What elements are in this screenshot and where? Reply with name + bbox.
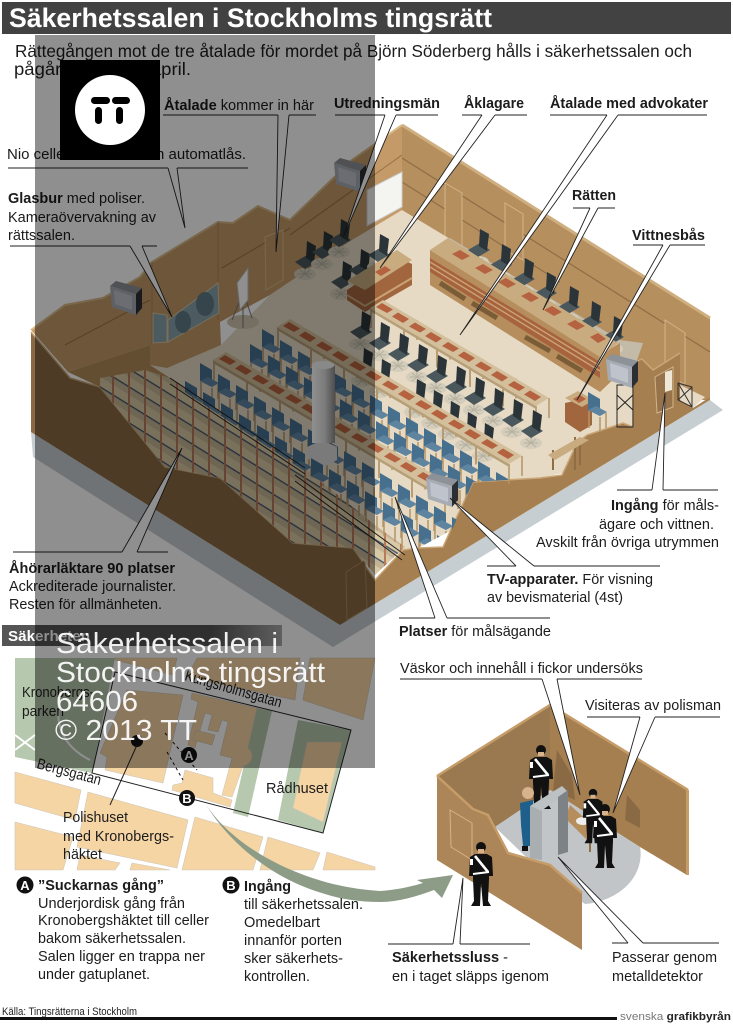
court quarter outline (92, 672, 351, 833)
note B: Ingång: till säkerhetssalen. (244, 896, 363, 913)
tunnel dashed line (165, 733, 197, 780)
chairs: utredningsmän (294, 219, 390, 300)
map labels: parken (22, 703, 64, 720)
callout: TV-apparater: av bevismaterial (4st) (487, 589, 623, 606)
callout: Utredningsmän (334, 95, 440, 238)
map labels: Polishuset (63, 809, 129, 826)
callout: Rätten (543, 187, 616, 310)
note A: Suckarnas gång: bakom säkerhetssalen. (38, 930, 186, 947)
watermark text: © 2013 TT (55, 715, 197, 747)
marker B: B (182, 791, 192, 806)
callout: Ingång för målsägare: Ingång för måls- (611, 497, 719, 514)
note A: Suckarnas gång: Salen ligger en trappa ner (38, 948, 205, 965)
note B: Ingång: sker säkerhets- (244, 950, 343, 967)
note B: Ingång: innanför porten (244, 932, 342, 949)
callout: Väskor (400, 660, 643, 795)
note A: Suckarnas gång (16, 876, 209, 983)
judges platform (435, 238, 643, 375)
callout: Åtalade med advokater: Åtalade med advokater (550, 95, 708, 112)
note A: Suckarnas gång: Kronobergshäktet till celler (38, 912, 209, 929)
TV: left wall (110, 281, 142, 315)
callout: Glasbur (8, 190, 172, 317)
pillar (307, 361, 337, 468)
TV: front (426, 473, 458, 507)
map labels (22, 668, 329, 863)
black chairs: row 2 (351, 348, 495, 462)
front wall door (346, 560, 367, 620)
note B: Ingång: B (226, 878, 236, 893)
railing (170, 378, 405, 560)
intro text (14, 41, 692, 79)
intro text: pågår till den 17 april. (14, 59, 191, 79)
back left wall (437, 705, 550, 827)
intro text: Rättegången mot de tre åtalade för mordet på Björn Söderberg hålls i säkerhetssalen och (15, 41, 692, 61)
source and footer: Källa: Tingsrätterna i Stockholm (2, 1006, 137, 1018)
gallery seating 90 seats (100, 370, 405, 575)
callout: Ingång för målsägare (536, 393, 719, 551)
map labels: Kungsholmsgatan (183, 668, 284, 711)
floor (150, 210, 633, 560)
ground shadow (31, 400, 723, 647)
callout: Utredningsmän: Utredningsmän (334, 95, 440, 112)
title: Säkerhetssalen i Stockholms tingsrätt (9, 3, 492, 33)
front wall (437, 776, 582, 950)
callout: Vittnesbås: Vittnesbås (632, 227, 705, 244)
callout: Åhörarläktare (9, 448, 182, 613)
note A: Suckarnas gång: under gatuplanet. (38, 966, 150, 983)
marker A (181, 747, 197, 763)
side entrance: Ingång (655, 367, 705, 413)
callout: Visiteras (585, 697, 721, 813)
section heading bar (2, 625, 282, 646)
guard behind detector (529, 745, 553, 809)
title bar (2, 2, 731, 34)
guard at door (469, 842, 493, 906)
note A: Suckarnas gång: A (20, 878, 30, 893)
door: Åtalade (265, 230, 283, 290)
judges' bench (430, 238, 620, 392)
TV: back corner (334, 158, 366, 192)
security lock illustration (437, 705, 689, 950)
callout: Åhörarläktare: Resten för allmänheten. (9, 596, 162, 613)
callout: Åtalade med advokater (460, 95, 708, 335)
callout: Åhörarläktare: Ackrediterade journalister. (9, 578, 176, 595)
callout: Säkerhetssluss (388, 878, 549, 985)
witness box (565, 391, 607, 432)
whiteboard on easel (227, 268, 259, 329)
guard at table (583, 789, 603, 843)
callout: Åklagare: Åklagare (464, 95, 524, 112)
map labels: Rådhuset (266, 780, 329, 797)
delegate row 2 (213, 352, 458, 517)
source and footer (0, 1006, 731, 1023)
doors on back wall (445, 183, 685, 385)
note B: Ingång (222, 876, 363, 985)
callout: Ingång för målsägare: ägare och vittnen. (599, 516, 714, 533)
court building (188, 693, 257, 797)
note A: Suckarnas gång: ”Suckarnas gång” (38, 877, 164, 894)
callout: Åhörarläktare: Åhörarläktare 90 platser (9, 560, 175, 577)
note B: Ingång: Ingång (244, 878, 291, 895)
callout: Glasbur: Kameraövervakning av (8, 209, 156, 226)
callout: Ingång för målsägare: Avskilt från övriga utrymmen (536, 534, 719, 551)
watermark text (55, 628, 325, 747)
note A: Suckarnas gång: Underjordisk gång från (38, 895, 185, 912)
watermark overlay panel (35, 35, 375, 768)
arrow to security lock (205, 803, 453, 902)
callout: Nio celler (7, 146, 248, 228)
callout: Säkerhetssluss: Säkerhetssluss - (392, 949, 508, 966)
watermark text: 64606 (56, 686, 138, 718)
blue chairs row 2 (200, 363, 456, 540)
note B: Ingång: kontrollen. (244, 968, 310, 985)
callout: Nio celler: Nio celler med larm och automatlås. (7, 146, 246, 163)
side table (548, 437, 589, 470)
Rådhuset block (293, 742, 342, 822)
source and footer: svenska grafikbyrån (620, 1011, 731, 1023)
door (450, 810, 472, 860)
Polishuset block (100, 690, 183, 783)
callout: Säkerhetssluss: en i taget släpps igenom (392, 968, 549, 985)
floor (495, 790, 641, 904)
guard with wand (593, 804, 617, 868)
presentation screen (367, 172, 402, 226)
callout: Väskor: Väskor och innehåll i fickor undersöks (400, 660, 643, 677)
callout: TV-apparater: TV-apparater. För visning (487, 571, 653, 588)
delegate row 1 (277, 319, 522, 484)
callout: Platser för målsägande (395, 497, 551, 640)
table with tray (565, 805, 592, 852)
black chairs: row 1 (349, 311, 543, 449)
blue chairs row 1 (262, 329, 508, 482)
city blocks (15, 658, 375, 870)
blue chairs row 1b (250, 344, 476, 505)
man in blue suit (520, 787, 534, 851)
section heading bar: Säkerheten (8, 628, 90, 645)
callout: Platser för målsägande: Platser för målsägande (399, 623, 551, 640)
callout: Visiteras: Visiteras av polisman (585, 697, 721, 714)
judges' chairs (467, 229, 624, 355)
callout: Glasbur: Glasbur med poliser. (8, 190, 145, 207)
wall shadows (553, 750, 640, 835)
callout: Åtalade kommer in här: Åtalade kommer in här (164, 97, 314, 114)
front wall with stepped cut (31, 332, 710, 625)
callout: Vittnesbås (577, 227, 705, 400)
marker dot (131, 735, 143, 747)
callout: Passerar: Passerar genom (612, 949, 717, 966)
courtroom cutaway illustration (31, 125, 723, 647)
desks and chairs: row 0 (370, 300, 549, 426)
marker B (179, 790, 195, 806)
map labels: häktet (63, 846, 103, 863)
note B: Ingång: Omedelbart (244, 914, 321, 931)
back right wall (550, 705, 688, 875)
blue chairs row 3 (185, 381, 440, 549)
prosecutor desk (347, 250, 412, 312)
metal detector (530, 786, 568, 860)
callout: Passerar (558, 857, 719, 985)
marker A: A (184, 748, 194, 763)
back left wall (31, 125, 402, 372)
logo: TT (60, 60, 160, 160)
map labels: med Kronobergs- (63, 828, 174, 845)
TV: witness area with stand (606, 354, 638, 427)
callout: Åklagare (380, 95, 527, 268)
callout: Passerar: metalldetektor (612, 968, 703, 985)
callout: Glasbur: rättssalen. (8, 227, 75, 244)
glass cage (153, 283, 219, 343)
map labels: Kronobergs- (22, 684, 94, 701)
callout: TV-apparater (450, 498, 660, 606)
location map (15, 658, 375, 870)
gallery entry ledge (68, 345, 170, 387)
watermark text: Stockholms tingsrätt (56, 657, 325, 689)
park and green areas (15, 658, 351, 833)
back right wall (402, 125, 710, 400)
callout: Rätten: Rätten (572, 187, 616, 204)
watermark text: Säkerhetssalen i (56, 628, 278, 660)
callout: Åtalade kommer in här (163, 97, 316, 252)
map labels: Bergsgatan (35, 755, 103, 789)
